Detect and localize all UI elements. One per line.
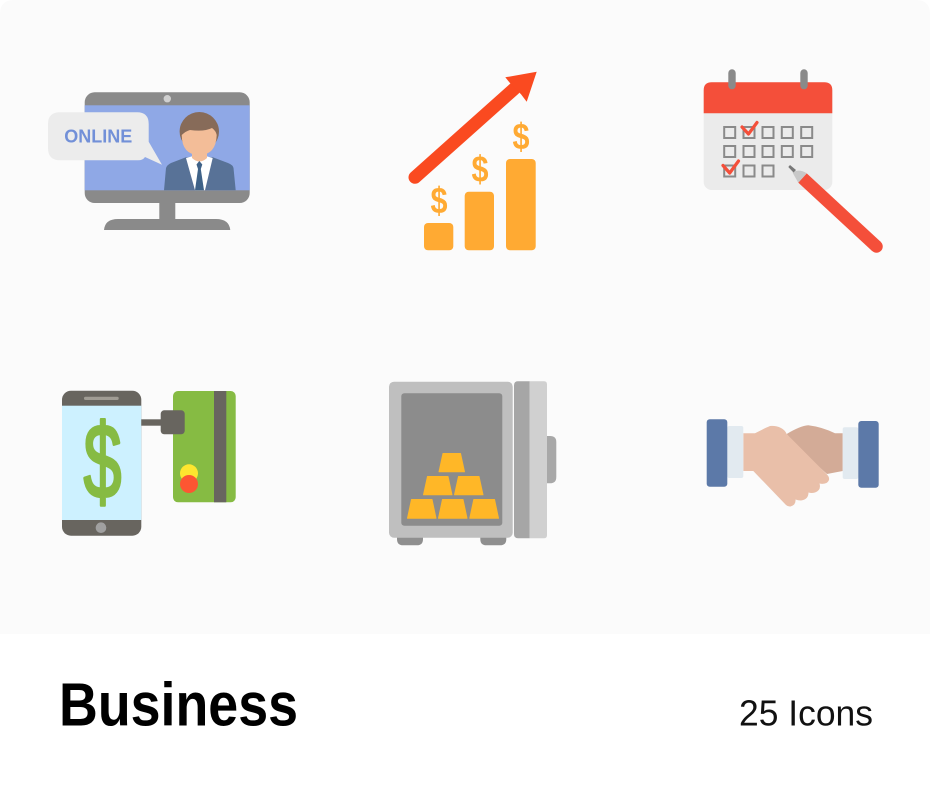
icon count: 25 Icons: [739, 693, 873, 734]
left hand: [743, 426, 829, 507]
monitor frame: [85, 92, 250, 203]
icon: phone and credit card payment: [62, 391, 236, 536]
bars: [424, 159, 536, 250]
left shirt cuff: [727, 426, 743, 478]
speech bubble: [48, 112, 162, 165]
right hand: [787, 425, 843, 474]
phone speaker: [84, 397, 119, 400]
phone body: [62, 391, 141, 536]
monitor screen: [85, 105, 250, 190]
safe handle: [545, 436, 556, 483]
dollar signs: $: [430, 180, 448, 221]
safe interior: [401, 393, 502, 526]
dollar signs: $: [472, 148, 489, 190]
presenter: [164, 112, 236, 190]
day boxes: [724, 127, 812, 176]
bubble label: ONLINE: [64, 126, 132, 147]
phone home button: [96, 522, 106, 533]
pen: [788, 165, 883, 253]
card chip circles: [180, 464, 198, 493]
camera dot: [164, 95, 171, 102]
icon: handshake: [707, 419, 879, 507]
calendar header: [704, 82, 832, 113]
icon: safe with gold bars: [389, 381, 556, 545]
growth arrow: [415, 72, 537, 177]
phone screen: [62, 406, 141, 520]
safe door: [514, 381, 547, 538]
title: Business: [59, 670, 298, 738]
card stripe: [214, 391, 226, 502]
large dollar sign: $: [84, 403, 122, 521]
right shirt cuff: [843, 427, 858, 479]
gold bars: [408, 454, 498, 518]
icon: growth bar chart: [415, 72, 537, 250]
safe feet: [397, 535, 506, 545]
credit card: [173, 391, 236, 502]
dollar signs: $: [512, 116, 530, 157]
check marks: [723, 122, 757, 173]
binder rings: [728, 69, 808, 89]
left sleeve: [707, 419, 727, 487]
safe body: [389, 382, 513, 538]
right sleeve: [858, 421, 879, 488]
dollar signs: [430, 116, 530, 221]
cable and plug: [141, 410, 185, 434]
monitor stand: [104, 200, 230, 230]
icon: calendar with pen: [704, 69, 883, 253]
calendar page: [704, 82, 832, 190]
icon: online video monitor: [48, 92, 250, 230]
